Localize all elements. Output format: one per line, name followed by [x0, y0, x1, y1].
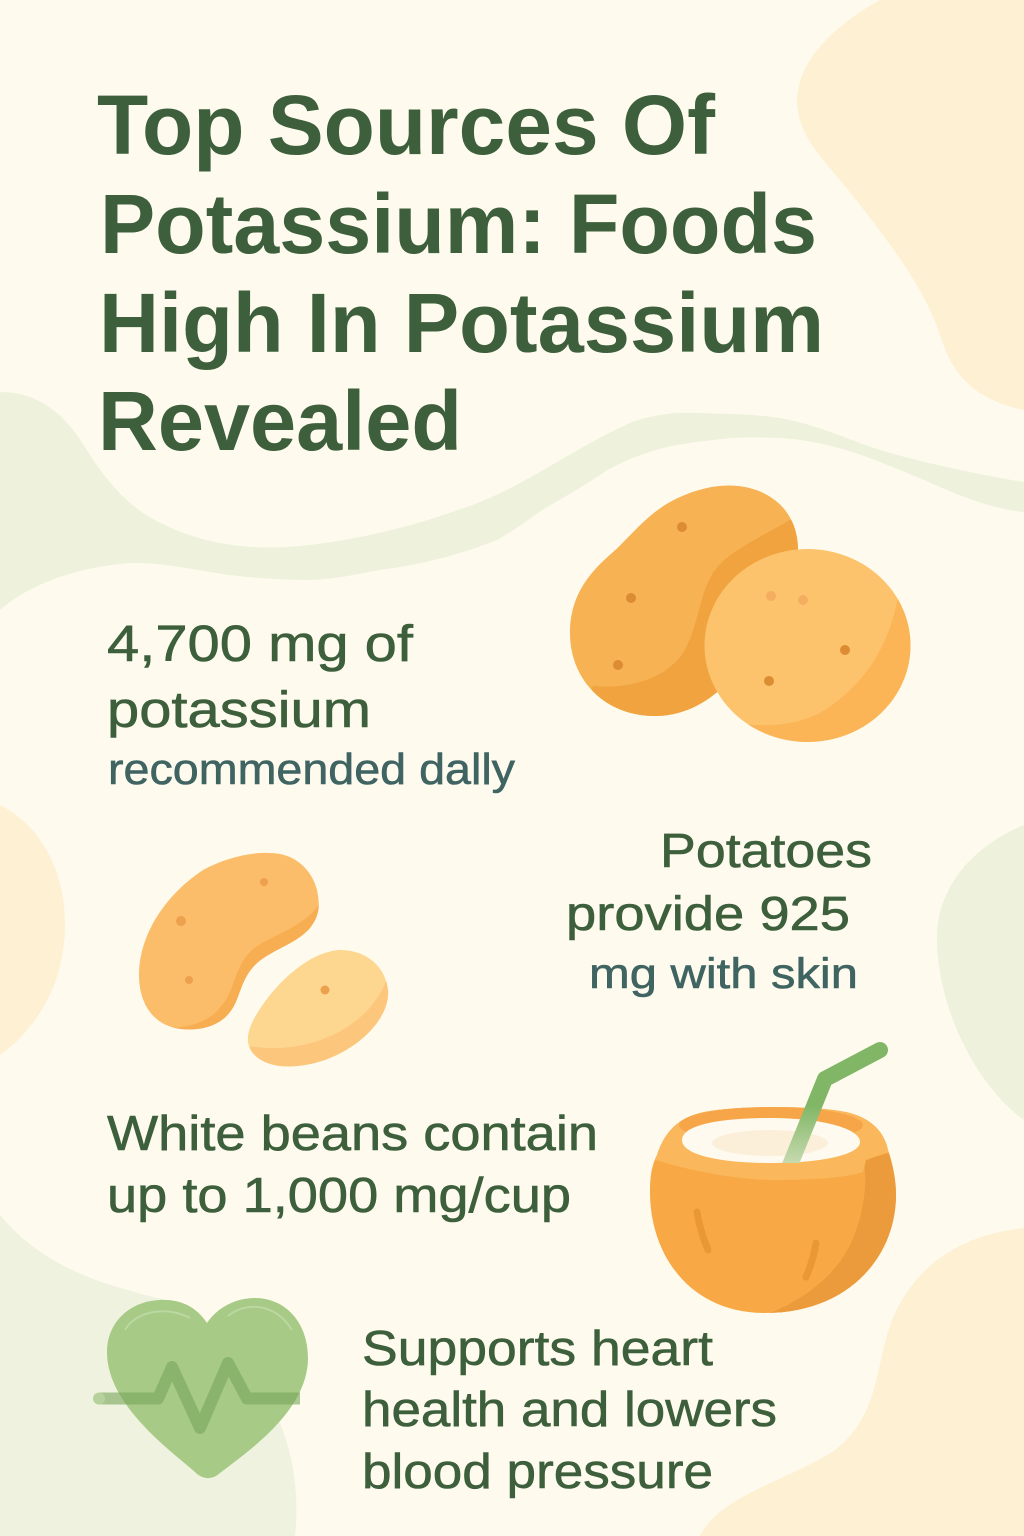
text: potatoes: mg with skin: [589, 950, 858, 998]
text: potatoes: Potatoes: [660, 825, 872, 878]
background blob: bottom left green: [0, 1215, 296, 1536]
text: heart health: blood pressure: [362, 1445, 713, 1499]
icon: two potatoes: [570, 486, 910, 742]
text: daily potassium: 4,700 mg of: [107, 615, 414, 672]
background blob: left peach: [0, 805, 65, 1055]
text: heart health: [362, 1322, 777, 1499]
text: potatoes: [566, 825, 872, 998]
title: Top Sources Of: [97, 78, 716, 172]
title: Potassium: Foods: [100, 177, 817, 271]
icon: white beans: [139, 853, 400, 1080]
title: [97, 78, 824, 468]
title: High In Potassium: [99, 276, 824, 370]
background blob: bottom right peach: [700, 1228, 1024, 1536]
background blob: top right peach: [797, 0, 1024, 410]
text: white beans: [107, 1107, 598, 1223]
text: white beans: up to 1,000 mg/cup: [107, 1169, 571, 1223]
background wave: green swoosh: [0, 392, 1024, 610]
title: Revealed: [98, 374, 462, 468]
text: potatoes: provide 925: [566, 888, 850, 941]
icon: heart with pulse line: [93, 1298, 308, 1478]
text: heart health: Supports heart: [362, 1322, 713, 1376]
text: daily potassium: [107, 615, 515, 794]
text: heart health: health and lowers: [362, 1383, 777, 1437]
icon: coconut drink with straw: [640, 1050, 900, 1320]
background blob: right green: [937, 825, 1024, 1120]
text: white beans: White beans contain: [107, 1107, 598, 1161]
text: daily potassium: potassium: [107, 681, 371, 738]
text: daily potassium: recommended dally: [108, 745, 515, 794]
